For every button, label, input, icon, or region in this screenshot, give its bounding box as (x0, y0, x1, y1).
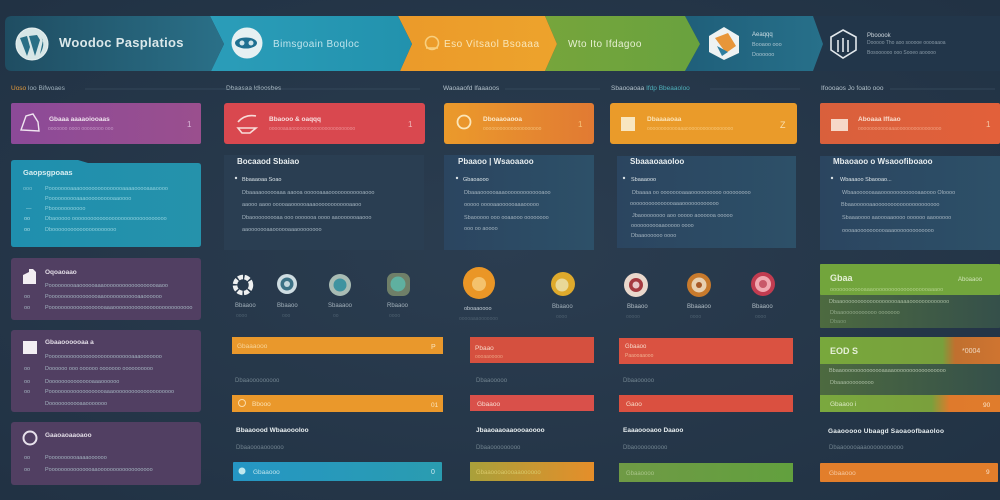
header segment: title (5, 16, 224, 71)
panel: purple 2: Dooooooooooaaooooooo (45, 401, 107, 407)
panel: teal: Dbaooooo ooooooooooooooooooooooooooooooo (45, 216, 167, 222)
panel: purple 2: oo (24, 379, 30, 385)
header segment: blue (210, 16, 412, 71)
icon: amber ring (687, 273, 712, 320)
panel: content column 3: Gbaoaooo (463, 177, 489, 183)
panel: content column 5: oooaaoooooooooaaaooooooooooooo (842, 228, 934, 234)
header note: dark segment (867, 33, 946, 56)
bar: red tall column 4: Paaooaaooo (625, 353, 654, 359)
heading: lower column 2: Bbaaoood Wbaaoooloo (236, 427, 309, 434)
header note: teal segment: Doooooo (752, 52, 774, 58)
bar: green column 4 (619, 463, 793, 482)
header note: dark segment: Bosoooooo ooo Sooeo aooooo (867, 50, 936, 56)
panel: content column 4: oooooooooaaooooo oooo (631, 223, 694, 229)
header segment: dark end (813, 16, 1000, 71)
card: purple: Gbaaa aaaaoiooaas (49, 116, 110, 123)
card: purple: 1 (187, 120, 192, 129)
panel: green stat 1: Gbaa (830, 273, 854, 283)
bar: blue: 0 (431, 469, 435, 476)
panel: teal: Poooooooooaaaoooooooooaaoooo (45, 196, 131, 202)
icon: badge green (387, 273, 410, 319)
bar: red tall column 4: Gbaaoo (625, 344, 647, 350)
panel: purple 3: Gaaoaoaaoaoo (45, 432, 92, 439)
icon: badge teal (328, 274, 353, 319)
bar: green orange: 90 (983, 402, 991, 409)
header segment: green (545, 16, 700, 71)
bar: red tall column 4 (619, 338, 793, 364)
bar: orange 1 (232, 337, 443, 354)
panel: green stat 2: Bbaaoooooooooooooaaaaooooooooooooooooo (829, 368, 946, 374)
icon: pink: oooo (755, 314, 766, 320)
text: lower note column 2: Dbaaoooaoooooo (236, 445, 284, 451)
panel: content column 2: aaooo aaoo ooooaaoooooaaaoooooooooooaaoo (242, 202, 361, 208)
panel: teal: ooo (23, 186, 32, 192)
panel: purple 3: oo (24, 467, 30, 473)
bar: olive orange (470, 462, 594, 481)
panel: content column 2: aaooooooaaoooooaaaoooooooo (242, 227, 322, 233)
header note: teal segment (752, 32, 782, 58)
icon: badge green: oooo (389, 313, 400, 319)
bar: blue (233, 462, 442, 481)
text: lower note column 4: Dbaoooooooooo (623, 445, 668, 451)
panel: content column 3: Pbaaoo | Wsaoaaoo (458, 157, 534, 166)
icon: flame card (831, 119, 848, 131)
card: orange (444, 103, 594, 144)
heading: column 3: Waoaaofd Ifaaaoos (443, 85, 500, 92)
panel: teal: oo (24, 216, 30, 222)
panel: green stat 1: oooooooooooaaaooooooooooooooooooaaaoo (830, 287, 943, 293)
panel: content column 3: ooooo ooooaaoooooaaaooooo (464, 202, 539, 208)
panel: content column 5: Wbaaaoo Sbaooao... (840, 177, 892, 183)
card: purple: ooooooo oooo oooooooo ooo (48, 126, 114, 132)
icon: calendar (23, 341, 37, 354)
card: amber: Z (780, 120, 786, 130)
panel: green stat 2 (820, 337, 1000, 395)
header note: teal segment: Booaoo ooo (752, 42, 782, 48)
card: red (224, 103, 425, 144)
icon: gear: oooo (236, 313, 247, 319)
icon: badge blue: ooo (282, 313, 291, 319)
panel: teal: Gaopsgpoaas (23, 168, 73, 177)
icon: badge teal: oo (333, 313, 339, 319)
panel: content column 2 (224, 155, 424, 250)
panel: content column 4: Sbaaaooo (631, 177, 656, 183)
panel: content column 3: ooo oo aoooo (464, 226, 498, 232)
panel: purple 1: Pooooooooaaoooooaaaoooooooooooooooooaaoo (45, 283, 168, 289)
header label: blue: Bimsgoain Boqloc (273, 39, 359, 50)
bar: orange 2: Bbooo (252, 401, 271, 408)
panel: purple 2: Gbaaoooooaa a (45, 339, 94, 346)
card: orange: Dboaaoaooa (483, 116, 522, 123)
panel: content column 5: Sbaaaoooo aaoooaaoooo oooooo aaoooooo (842, 215, 951, 221)
bar: blue: Gbaaooo (253, 469, 280, 476)
header label: orange: Eso Vitsaol Bsoaaa (444, 39, 540, 50)
card: red: Bbaooo & oaqqq (269, 116, 321, 123)
icon: pink (751, 272, 775, 320)
header note: dark segment: Pbooook (867, 33, 892, 39)
icon: rose (624, 273, 648, 320)
panel: green stat 1: Dbaaooooooooooooooooooaaaaooooooooooooo (829, 299, 949, 305)
bar: orange 1: P (431, 344, 436, 351)
panel: purple 1: Pooooooooooooooooooaaaoooooooooooooooooooooooooo (45, 305, 192, 311)
panel: content column 3 (444, 155, 594, 250)
icon: gear: Bbaaoo (235, 303, 256, 309)
bar: green orange: Gbaaoo i (830, 401, 856, 408)
section headings (11, 85, 995, 92)
panel: purple 1: Pooooooooooooooooaaoooooooooooaaoooooo (45, 294, 162, 300)
icon: badge teal: Sbaaaoo (328, 303, 353, 309)
panel: purple 1: oo (24, 294, 30, 300)
icon: yellow: Bbaaoo (552, 304, 573, 310)
icon: WordPress logo (16, 28, 48, 60)
panel: content column 2: Dbaaaaoooooaaa aaooa oooooaaaoooooooooooaooo (242, 190, 374, 196)
text: lower note column 5: Dbaaooooaaaooooooooooo (829, 445, 904, 451)
icon: yellow (551, 272, 575, 320)
header note: teal segment: Aeaqqq (752, 32, 773, 38)
bar: orange 2: 01 (431, 402, 439, 409)
card: amber (610, 103, 797, 144)
icon: gear (235, 277, 256, 319)
bar: red tall column 3 (470, 337, 594, 363)
bar: orange column 5: Gbaaooo (829, 470, 856, 477)
header segment: teal 5 (685, 16, 823, 71)
panel: purple 2: Dooooooooooooooaaaoooooo (45, 379, 119, 385)
panel: content column 5: Bbaaoooooaaooooooooooooooooooooo (841, 202, 940, 208)
bar: orange column 5: 9 (986, 469, 990, 476)
icon: ring (24, 432, 36, 444)
icon: purple card (21, 114, 39, 131)
icon: badge green: Rbaaoo (387, 303, 409, 309)
panel: content column 5 (820, 156, 1000, 250)
icon: large orange: ooooaaaooooooo (459, 316, 498, 322)
text: row label column 4: Dbaaooooo (623, 378, 655, 384)
card: amber: oooooooooooaaaooooooooooooooooo (647, 126, 733, 132)
text: lower note column 3: Dbaaooooooooo (476, 445, 521, 451)
card: orange: ooooooooooooooooooooo (483, 126, 542, 132)
card: flame (820, 103, 1000, 144)
heading: column 2: Dbaasaa ldioosbes (226, 85, 282, 92)
panel: teal: Dbooooooooooooooooooooo (45, 227, 116, 233)
panel: purple 2: Poooooooooooooooooooooooooooaaaooooooo (45, 354, 162, 360)
panel: purple 3: Pooooooooooooooaaoooooooooooooooooo (45, 467, 153, 473)
card: red: 1 (408, 120, 413, 129)
header label: green: Wto Ito Ifdagoo (568, 39, 642, 50)
bar: orange column 5 (820, 463, 998, 482)
bar: red column 4 (619, 395, 793, 412)
icon: yellow: oooo (556, 314, 567, 320)
text: row label: Dbaaooooooooo (235, 378, 280, 384)
heading: lower column 5: Gaaooooo Ubaagd Saoaoofbaaoloo (828, 428, 944, 435)
header arrow band (5, 16, 1000, 71)
bar: red column 4: Gaoo (626, 401, 642, 408)
icon: rose: Bbaaoo (627, 304, 648, 310)
icon: pink: Bbaaoo (752, 304, 773, 310)
panel: green stat 1 (820, 264, 1000, 328)
icon: badge blue: Bbaaoo (277, 303, 298, 309)
icon: blue circle badge (232, 28, 262, 58)
panel: purple 2: oo (24, 366, 30, 372)
panel: green stat 1: Dbaaooooooooooo ooooooo (830, 310, 900, 316)
icon: amber ring: oooo (690, 314, 701, 320)
bar: red tall column 3: Pbaao (475, 345, 494, 352)
icon: orange card (458, 116, 470, 128)
panel: green stat 1: Aboaaoo (958, 277, 983, 283)
icon: outlined hexagon (831, 30, 856, 58)
heading: column 5: Ifoooaos Jo foato ooo (821, 85, 884, 92)
icon: colourful hexagon (709, 27, 739, 60)
panel: content column 3: Sbaooooo ooo ooaaooo oooooooo (464, 215, 549, 221)
panel: content column 2: Dbaooooooooaa ooo ooooooa oooo aaooooooaaooo (242, 215, 371, 221)
bar: green orange (820, 395, 1000, 412)
panel: green stat 2: EOD S (830, 346, 858, 356)
heading: lower column 4: Eaaaoooaoo Daaoo (623, 427, 683, 434)
bar: orange 2 (232, 395, 443, 412)
icon: amber ring: Bbaaaoo (687, 304, 712, 310)
panel: green stat 1: Dbaoo (830, 319, 846, 325)
card: flame: 1 (986, 120, 991, 129)
panel: green stat 2: *0004 (962, 348, 980, 355)
card: red: oooooaaaooooooooooooooooooooooo (269, 126, 355, 132)
bar: red column 3 (470, 395, 594, 411)
panel: content column 4: Dbaaaa oo oooooooaaaoooooooooo ooooooooo (632, 190, 751, 196)
panel: green stat 2: Dbaaaooooooooo (830, 380, 874, 386)
panel: content column 4 (617, 156, 796, 248)
panel: content column 3: Dbaaaoooooaaaooooooooooooaoo (464, 190, 551, 196)
icon: house (23, 269, 36, 284)
panel: content column 2: Bocaaod Sbaiao (237, 157, 299, 166)
panel: content column 2: Bbaaaoaa Soao (242, 177, 281, 183)
bar: olive orange: Gbaaoooaoooaaoooooo (476, 470, 541, 476)
header segment: orange (398, 16, 557, 71)
panel: purple 1 (11, 258, 201, 320)
heading: column 4: Sbaooaoaa Ifdp Bbeaaoloo (611, 85, 690, 92)
header note: dark segment: Dooooo Tho aoo sooooe ooooaaoa (867, 40, 946, 46)
icon: large orange: oboaaoooo (464, 306, 492, 312)
icon row (235, 267, 775, 322)
text: row label column 3: Dbaaooooo (476, 378, 508, 384)
panel: content column 5: Mbaoaoo o Wsaoofiboaoo (833, 157, 933, 166)
panel: content column 4: Dbaaoooooo oooo (631, 233, 676, 239)
panel: purple 1: Oqoaoaao (45, 269, 77, 276)
icon: large orange (459, 267, 498, 322)
panel: purple 3: Poooooooooaaaaoooooo (45, 455, 107, 461)
icon: badge blue (277, 274, 298, 319)
panel: purple 2: Doooooo ooo oooooo ooooooo oooooooooo (45, 366, 153, 372)
panel: purple 2: oo (24, 389, 30, 395)
panel: content column 4: ooooooooooooooaaaoooooooooooo (630, 201, 719, 207)
panel: content column 5: Wbaaoooooaaaooooooooooooaaoooo Oloooo (842, 190, 955, 196)
card: flame: Aboaaa Iffaao (858, 116, 901, 123)
panel: teal: — (26, 206, 32, 212)
card: purple (11, 103, 201, 144)
panel: teal: Poooooooaaaooooooooooooooaaaaooooaaaoooo (45, 186, 168, 192)
panel: content column 4: Sbaaaoaaoloo (630, 157, 684, 166)
panel: content column 4: Jbaoooooooo aoo ooooo aoooooa ooooo (632, 213, 733, 219)
heading: lower column 3: Jbaaoaaoaaoooaoooo (476, 427, 545, 434)
bar: red tall column 3: oooaaooooo (475, 354, 503, 360)
panel: teal: oo (24, 227, 30, 233)
panel: teal: Pbooooooooooo (45, 206, 85, 212)
icon: amber card (621, 117, 635, 131)
icon: orange badge (426, 36, 438, 50)
card: flame: oooooooooooaaaoooooooooooooooo (858, 126, 942, 132)
panel: purple 1: oo (24, 305, 30, 311)
icon: rose: ooooo (626, 314, 640, 320)
panel: purple 2: Pooooooooooooooooooaaaoooooooooooooooooooo (45, 389, 174, 395)
panel: purple 3 (11, 422, 201, 485)
icon: red card (238, 116, 256, 133)
bar: green column 4: Gbaaoooo (626, 471, 655, 477)
title text: Woodoc Pasplatios (59, 35, 184, 50)
bar: orange 1: Gbaaaooo (237, 343, 268, 350)
card: orange: 1 (578, 120, 583, 129)
panel: purple 2 (11, 330, 201, 412)
panel: purple 3: oo (24, 455, 30, 461)
panel: teal (11, 160, 201, 247)
card: amber: Dbaaaaoaa (647, 116, 682, 123)
heading: column 1: Uoso loo Bifwoaes (11, 85, 66, 92)
bar: red column 3: Gbaaoo (477, 401, 501, 408)
